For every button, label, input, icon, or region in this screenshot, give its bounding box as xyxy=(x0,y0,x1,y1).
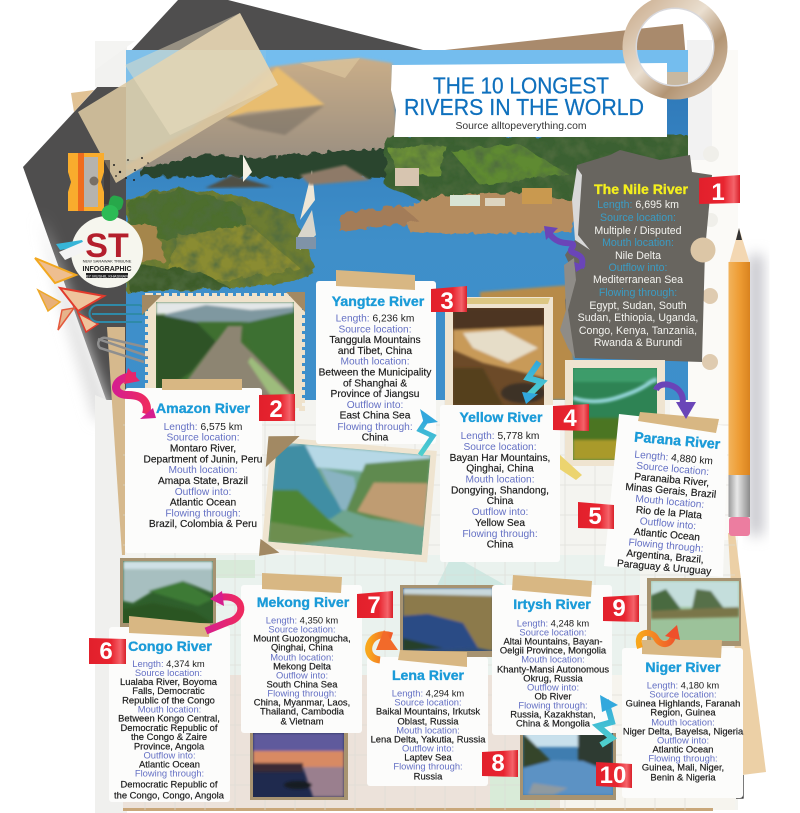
facts: Parana River: Mouth location: xyxy=(635,494,705,511)
number flag 6: 6 xyxy=(99,638,113,665)
title card xyxy=(391,63,667,137)
facts: Yangtze River: Source location: xyxy=(338,324,412,336)
grey cardboard sheet xyxy=(23,0,423,420)
facts: Amazon River: Amapa State, Brazil xyxy=(158,476,248,487)
icon: green push pin xyxy=(102,194,125,221)
far sky xyxy=(126,50,266,160)
boat xyxy=(296,210,316,250)
heading: Yangtze River: Yangtze River xyxy=(332,293,425,309)
facts: Lena River: Russia xyxy=(414,770,443,782)
facts: Mekong River: Thailand, Cambodia xyxy=(260,706,345,716)
photo: Niger River xyxy=(647,578,741,646)
tan paper bottom right xyxy=(728,533,766,775)
logo badge: ST: ST xyxy=(85,227,129,265)
facts: Yellow River: Bayan Har Mountains, xyxy=(450,453,550,464)
facts: Yellow River: Mouth location: xyxy=(465,474,535,486)
spiral holes xyxy=(702,69,719,370)
facts: Congo River: Democratic Republic of xyxy=(121,722,218,733)
facts: Niger River: Length: 4,180 km xyxy=(647,680,719,690)
brown paper top xyxy=(445,24,686,60)
facts: Lena River: Length: 4,294 km xyxy=(392,688,464,698)
arrow: Yellow River teal xyxy=(522,362,542,404)
number flag 10: 10 xyxy=(600,762,626,789)
tan paper left xyxy=(107,327,125,555)
facts: Congo River: Flowing through: xyxy=(135,768,204,778)
left island xyxy=(126,187,316,292)
panel: Yangtze River xyxy=(316,270,436,444)
facts: Congo River: Lualaba River, Boyoma xyxy=(120,676,218,687)
facts: Congo River: Republic of the Congo xyxy=(122,694,215,706)
arrow: Niger orange xyxy=(639,625,680,648)
logo badge: ST xyxy=(71,216,143,288)
arrow: Yangtze teal xyxy=(420,409,438,455)
panel: Nile River xyxy=(560,150,712,362)
facts: Niger River: Benin & Nigeria xyxy=(650,772,716,782)
tree line xyxy=(140,148,400,178)
facts: Irtysh River: Outflow into: xyxy=(527,682,579,692)
arrow: Amazon magenta xyxy=(116,368,156,419)
arrow: Irtysh blue xyxy=(598,695,618,745)
facts: Nile River: Flowing through: xyxy=(599,287,677,299)
facts: Yangtze River: China xyxy=(362,432,389,444)
facts: Yellow River: Qinghai, China xyxy=(466,464,534,474)
arrow: Lena orange xyxy=(369,630,398,660)
logo badge: ST: BY MUSHIL KHASMAN xyxy=(86,273,128,278)
small island & boats xyxy=(205,175,272,188)
heading: Niger River: Niger River xyxy=(645,659,721,675)
magnifying glass ring xyxy=(629,1,721,93)
facts: Nile River: Source location: xyxy=(600,212,676,224)
facts: Irtysh River: Altai Mountains, Bayan- xyxy=(503,636,603,646)
facts: Parana River: Paraguay & Uruguay xyxy=(616,558,713,578)
facts: Congo River: Province, Angola xyxy=(134,740,205,752)
facts: Niger River: Niger Delta, Bayelsa, Nigeria xyxy=(623,726,744,736)
heading: Yellow River: Yellow River xyxy=(459,409,543,425)
facts: Irtysh River: Mouth location: xyxy=(521,654,585,664)
buildings xyxy=(450,195,480,206)
facts: Yangtze River: Flowing through: xyxy=(337,422,413,433)
photo: Yangtze River xyxy=(258,433,437,571)
heading: Parana River: Parana River xyxy=(634,429,721,452)
facts: Irtysh River: Russia, Kazakhstan, xyxy=(510,708,596,720)
pencil xyxy=(728,228,762,536)
facts: Parana River: Paranaiba River, xyxy=(634,472,710,489)
facts: Irtysh River: Source location: xyxy=(519,626,587,638)
facts: Nile River: Congo, Kenya, Tanzania, xyxy=(579,325,697,337)
facts: Amazon River: Outflow into: xyxy=(175,487,231,498)
facts: Congo River: Length: 4,374 km xyxy=(132,658,205,669)
logo badge: ST: NEW SARAWAK TRIBUNE xyxy=(83,258,132,264)
facts: Parana River: Source location: xyxy=(636,461,710,478)
number flag 4 xyxy=(553,404,589,432)
far right strip xyxy=(660,72,688,86)
number flag 6 xyxy=(89,638,126,665)
facts: Congo River: the Congo & Zaire xyxy=(131,731,207,742)
facts: Yangtze River: East China Sea xyxy=(340,410,411,422)
buildings lower right xyxy=(480,285,575,400)
facts: Yangtze River: Province of Jiangsu xyxy=(331,389,419,400)
facts: Amazon River: Source location: xyxy=(166,432,240,444)
number flag 4: 4 xyxy=(563,405,577,432)
folded label strip xyxy=(56,240,92,260)
facts: Irtysh River: Ob River xyxy=(534,690,572,702)
panel: Parana River xyxy=(604,412,728,578)
facts: Lena River: Baikal Mountains, Irkutsk xyxy=(376,706,480,716)
facts: Amazon River: Mouth location: xyxy=(168,465,238,476)
tape xyxy=(512,575,592,597)
tape xyxy=(638,412,719,433)
facts: Lena River: Oblast, Russia xyxy=(398,716,459,726)
number flag 8 xyxy=(482,750,518,777)
facts: Parana River: Outflow into: xyxy=(639,516,697,532)
panel: Irtysh River xyxy=(492,575,612,735)
facts: Irtysh River: Length: 4,248 km xyxy=(517,618,589,628)
photo: Parana River xyxy=(558,360,665,480)
pencil shavings xyxy=(35,258,104,332)
facts: Nile River: Mediterranean Sea xyxy=(593,274,683,286)
photo: Lena River xyxy=(400,585,497,657)
facts: Congo River: Falls, Democratic xyxy=(132,685,205,696)
facts: Niger River: Atlantic Ocean xyxy=(653,744,713,754)
number flag 3: 3 xyxy=(440,288,454,315)
arrow: Parana purple xyxy=(656,384,696,419)
yellow tape xyxy=(558,455,582,480)
facts: Irtysh River: Khanty-Mansi Autonomous xyxy=(497,664,609,674)
number flag 2: 2 xyxy=(269,396,283,423)
facts: Yellow River: Outflow into: xyxy=(472,507,528,518)
facts: Yangtze River: Tanggula Mountains xyxy=(329,335,421,346)
facts: Mekong River: Mekong Delta xyxy=(273,660,332,672)
facts: Mekong River: Flowing through: xyxy=(267,688,337,698)
facts: Lena River: Source location: xyxy=(394,696,462,708)
facts: Amazon River: Length: 6,575 km xyxy=(164,422,242,433)
panel: Congo River xyxy=(109,616,230,802)
tape xyxy=(262,573,342,593)
tan scrap top-left xyxy=(71,90,94,112)
facts: Congo River: Between Kongo Central, xyxy=(118,712,220,724)
heading: Mekong River: Mekong River xyxy=(257,594,350,610)
tape xyxy=(129,616,210,637)
facts: Lena River: Outflow into: xyxy=(402,742,454,754)
title: THE 10 LONGEST xyxy=(433,72,609,98)
facts: Yangtze River: of Shanghai & xyxy=(343,378,407,390)
icon: grey paperclip xyxy=(98,338,158,362)
facts: Yellow River: Yellow Sea xyxy=(475,518,525,529)
number flag 5: 5 xyxy=(588,503,602,530)
facts: Amazon River: Atlantic Ocean xyxy=(170,498,236,508)
facts: Congo River: Democratic Republic of xyxy=(121,778,218,790)
facts: Irtysh River: Flowing through: xyxy=(518,700,588,710)
tape xyxy=(162,379,242,390)
right hillside trees xyxy=(385,135,688,225)
facts: Niger River: Mouth location: xyxy=(651,716,715,728)
facts: Irtysh River: China & Mongolia xyxy=(516,718,591,728)
heading: Lena River: Lena River xyxy=(392,667,465,683)
facts: Mekong River: Qinghai, China xyxy=(271,642,334,652)
heading: Congo River: Congo River xyxy=(128,638,212,654)
facts: Mekong River: & Vietnam xyxy=(280,716,324,726)
facts: Nile River: Length: 6,695 km xyxy=(597,199,679,211)
facts: Parana River: Flowing through: xyxy=(628,537,704,555)
arrow: Congo magenta xyxy=(206,591,241,631)
logo badge: ST: INFOGRAPHIC xyxy=(82,266,132,273)
facts: Mekong River: Length: 4,350 km xyxy=(266,614,338,626)
panel: Amazon River xyxy=(125,379,262,553)
facts: Congo River: the Congo, Congo, Angola xyxy=(114,790,225,800)
main photo: Nile landscape xyxy=(126,50,688,400)
photo: Mekong River xyxy=(250,733,348,800)
facts: Yangtze River: Length: 6,236 km xyxy=(336,314,414,324)
sky xyxy=(126,50,688,80)
number flag 1: 1 xyxy=(711,179,725,206)
facts: Parana River: Argentina, Brazil, xyxy=(626,548,704,566)
facts: Yellow River: Dongying, Shandong, xyxy=(451,486,549,496)
facts: Mekong River: South China Sea xyxy=(267,678,338,690)
facts: Parana River: Rio de la Plata xyxy=(635,505,703,522)
facts: Niger River: Region, Guinea xyxy=(650,706,716,718)
facts: Nile River: Rwanda & Burundi xyxy=(594,337,682,349)
source line: Source alltopeverything.com xyxy=(455,121,587,132)
facts: Niger River: Source location: xyxy=(649,688,717,700)
panel: Yellow River xyxy=(440,405,560,562)
facts: Lena River: Mouth location: xyxy=(396,724,460,736)
facts: Yangtze River: Outflow into: xyxy=(347,400,403,411)
facts: Yellow River: Flowing through: xyxy=(462,529,538,540)
facts: Niger River: Guinea Highlands, Faranah xyxy=(626,698,740,708)
tape xyxy=(642,640,722,658)
number flag 7: 7 xyxy=(367,592,381,619)
facts: Lena River: Laptev Sea xyxy=(404,752,453,762)
facts: Niger River: Flowing through: xyxy=(648,752,718,764)
facts: Yellow River: Length: 5,778 km xyxy=(461,431,539,442)
facts: Yellow River: China xyxy=(487,496,514,507)
panel: Mekong River xyxy=(241,573,362,733)
number flag 9: 9 xyxy=(612,595,626,622)
facts: Nile River: Multiple / Disputed xyxy=(594,225,682,237)
facts: Mekong River: Mouth location: xyxy=(270,652,334,662)
facts: Mekong River: Source location: xyxy=(268,624,336,634)
facts: Amazon River: Flowing through: xyxy=(165,508,241,520)
number flag 2 xyxy=(259,394,295,423)
facts: Lena River: Lena Delta, Yakutia, Russia xyxy=(371,734,486,744)
notebook paper xyxy=(95,40,738,813)
photo: Amazon River xyxy=(142,292,305,408)
facts: Mekong River: Mount Guozongmucha, xyxy=(253,632,351,644)
facts: Niger River: Outflow into: xyxy=(657,734,709,746)
number flag 3 xyxy=(431,286,467,315)
facts: Yangtze River: Mouth location: xyxy=(340,356,410,368)
pin circle xyxy=(690,238,716,262)
number flag 7 xyxy=(357,591,393,619)
facts: Amazon River: Montaro River, xyxy=(170,444,236,454)
facts: Yangtze River: and Tibet, China xyxy=(338,346,412,357)
facts: Congo River: Atlantic Ocean xyxy=(139,758,200,770)
tape xyxy=(398,650,467,667)
number flag 9 xyxy=(603,595,639,622)
facts: Lena River: Flowing through: xyxy=(393,760,463,772)
facts: Mekong River: Outflow into: xyxy=(276,670,328,680)
big paper tape xyxy=(78,13,278,183)
number flag 5 xyxy=(578,502,614,530)
facts: Amazon River: Department of Junin, Peru xyxy=(144,454,262,466)
heading: Amazon River: Amazon River xyxy=(156,400,251,416)
facts: Mekong River: China, Myanmar, Laos, xyxy=(254,696,350,708)
dune xyxy=(126,58,400,170)
tape xyxy=(336,270,415,290)
facts: Yellow River: China xyxy=(487,540,514,550)
photo: Congo River xyxy=(120,558,216,628)
facts: Irtysh River: Okrug, Russia xyxy=(523,672,583,684)
sharpener icon xyxy=(68,153,110,211)
photo: Irtysh River xyxy=(520,733,616,800)
arrow: Nile purple xyxy=(544,226,586,272)
facts: Parana River: Atlantic Ocean xyxy=(633,527,700,544)
facts: Yangtze River: Between the Municipality xyxy=(319,368,432,378)
facts: Nile River: Sudan, Ethiopia, Uganda, xyxy=(578,312,698,324)
facts: Nile River: Outflow into: xyxy=(609,262,667,274)
grid lines xyxy=(123,395,735,810)
far right trees xyxy=(575,150,688,290)
facts: Nile River: Mouth location: xyxy=(602,237,674,249)
facts: Amazon River: Brazil, Colombia & Peru xyxy=(149,519,257,530)
panel: Lena River xyxy=(367,650,488,786)
facts: Congo River: Outflow into: xyxy=(143,750,196,760)
facts: Parana River: Length: 4,880 km xyxy=(634,450,713,467)
title card: RIVERS IN THE WORLD xyxy=(404,94,644,120)
number flag 1 xyxy=(699,175,740,206)
heading: Irtysh River: Irtysh River xyxy=(513,596,591,612)
facts: Congo River: Source location: xyxy=(135,667,202,678)
facts: Yellow River: Source location: xyxy=(463,442,537,453)
heading: The Nile River: The Nile River xyxy=(594,181,689,197)
facts: Niger River: Guinea, Mali, Niger, xyxy=(642,762,724,772)
facts: Irtysh River: Oelgii Province, Mongolia xyxy=(500,644,607,656)
facts: Congo River: Mouth location: xyxy=(138,704,201,714)
icon: blue paperclip xyxy=(90,305,154,322)
facts: Nile River: Nile Delta xyxy=(615,250,661,262)
sandy bank xyxy=(400,193,585,234)
panel: Niger River xyxy=(622,640,744,798)
number flag 8: 8 xyxy=(491,750,505,777)
facts: Parana River: Minas Gerais, Brazil xyxy=(625,482,717,501)
photo: Yellow River xyxy=(445,297,553,407)
facts: Nile River: Egypt, Sudan, South xyxy=(589,300,687,312)
